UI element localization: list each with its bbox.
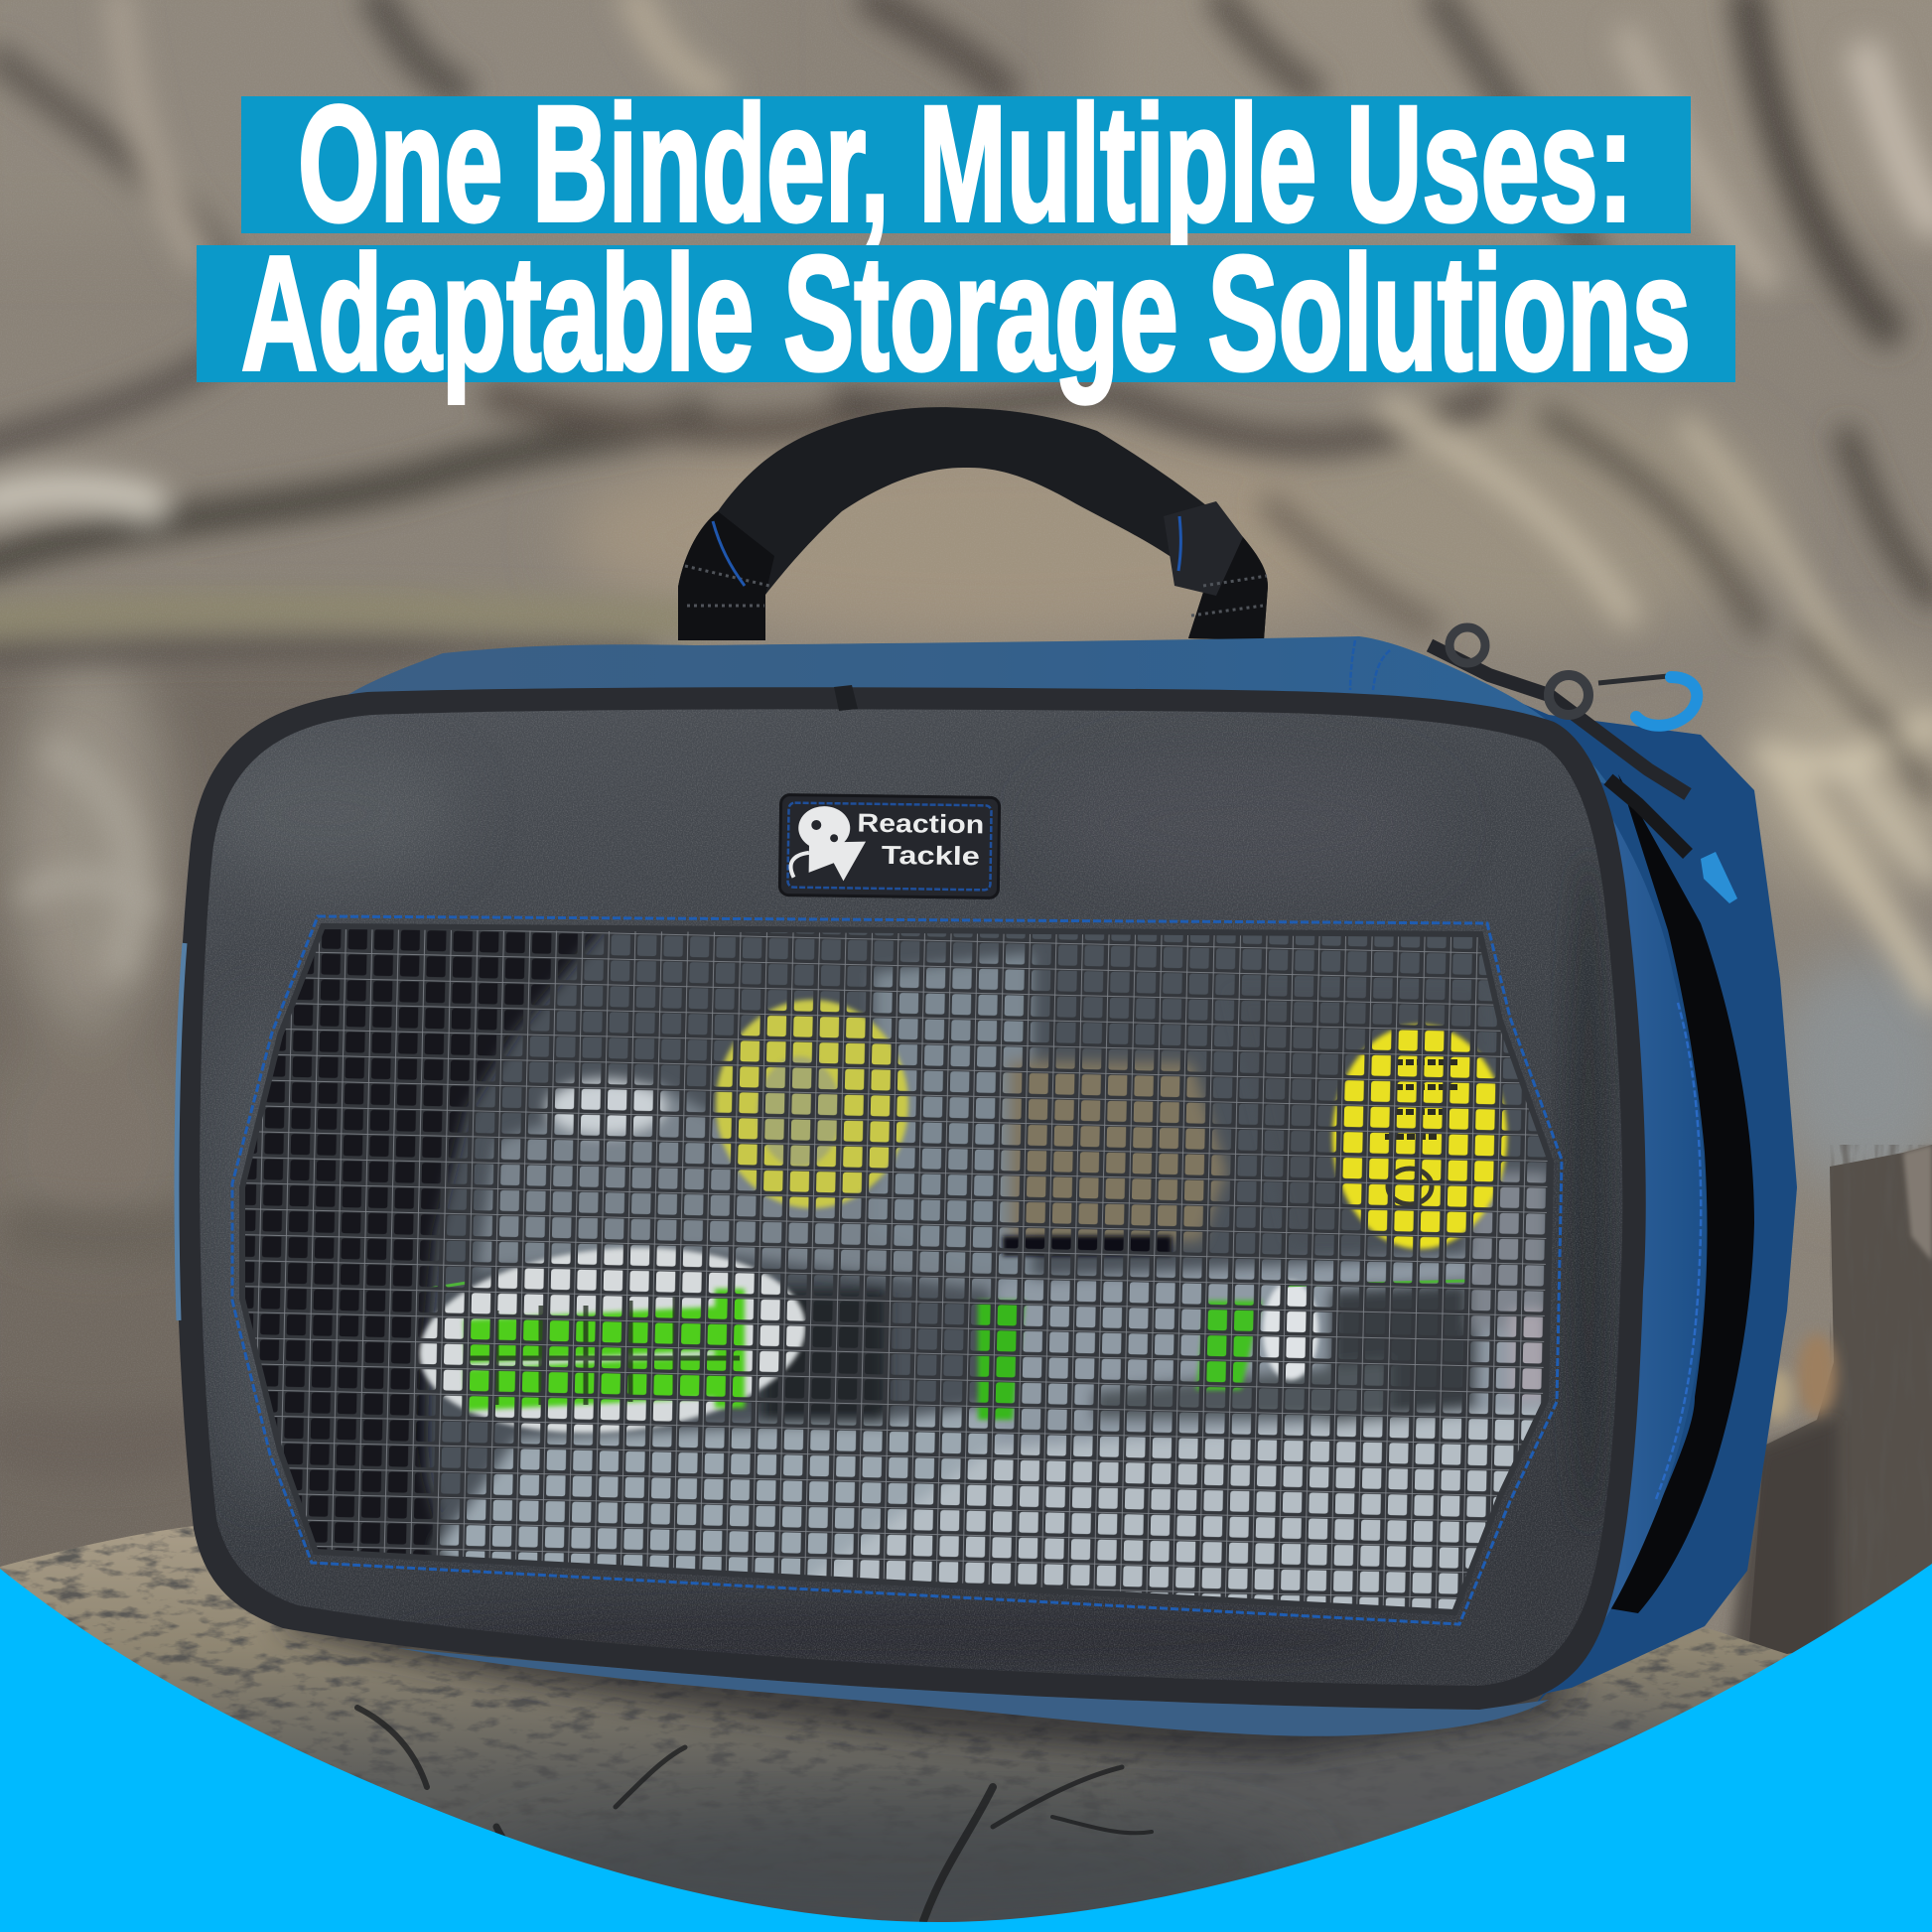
top blue panel: [347, 636, 1608, 784]
outer piping of front panel: [176, 687, 1646, 1710]
left blue edge: [177, 943, 185, 1320]
green lure labels: [978, 1301, 1025, 1420]
fabric shading: [179, 695, 1638, 1698]
bag handle: [678, 407, 1268, 640]
dark strip of small print: [1003, 1236, 1172, 1256]
zipper opening: [1608, 774, 1754, 1613]
yellow pale sticker: [716, 1000, 908, 1208]
piping notch: [834, 685, 858, 711]
patch text: Reaction: [857, 808, 985, 839]
white lure package: [417, 1245, 806, 1436]
bright blue curved base: [0, 1564, 1932, 1932]
dark text marks on package: [467, 1296, 740, 1405]
brand patch: Tackle: [882, 840, 980, 871]
rock ledge: [0, 1526, 1792, 1922]
title: [197, 72, 1735, 404]
product: mesh storage binder bag: [176, 407, 1797, 1736]
stitching on gusset: [1656, 1003, 1701, 1499]
tree stump right: [1727, 1145, 1932, 1668]
bottom blue strip: [397, 1648, 1549, 1736]
front panel: [200, 709, 1622, 1686]
patch logo mascot: [790, 806, 867, 882]
blue stitching around window: [232, 916, 1562, 1624]
green print on package: [464, 1289, 745, 1411]
blue zipper tab: [1701, 852, 1737, 903]
gusset front flap: [1529, 764, 1707, 1713]
mesh grid: [228, 913, 1569, 1628]
mesh window border: [242, 926, 1551, 1612]
zipper hardware: [1430, 627, 1737, 903]
back gusset blue: [1410, 655, 1797, 1710]
mesh window contents: [228, 913, 1569, 1628]
brand patch: [779, 794, 1000, 898]
bright yellow sticker: [1332, 1025, 1507, 1249]
top panel seam: [1350, 640, 1390, 690]
blue carabiner clip: [1636, 677, 1697, 726]
